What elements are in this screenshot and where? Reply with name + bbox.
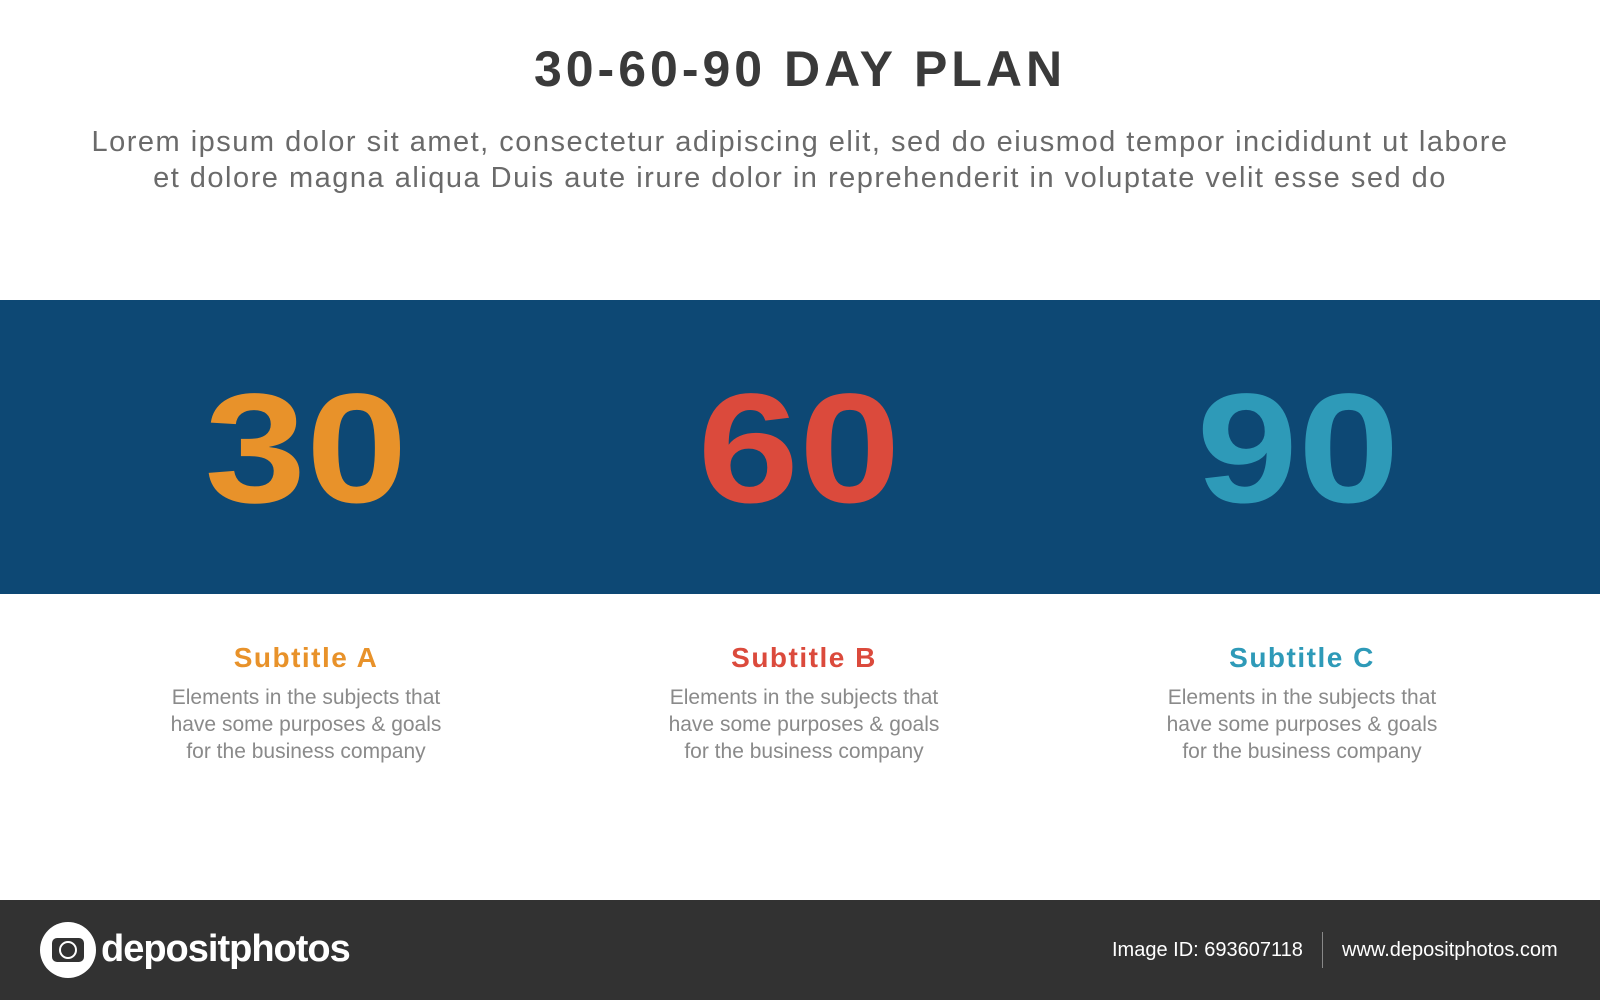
text C: Elements in the subjects that	[1168, 686, 1436, 709]
footer bar	[0, 900, 1600, 1000]
text C: for the business company	[1182, 740, 1422, 763]
text B	[669, 686, 939, 763]
text B: have some purposes & goals	[669, 713, 939, 736]
subtitle C: Subtitle C	[1229, 642, 1375, 673]
intro text: Lorem ipsum dolor sit amet, consectetur adipiscing elit, sed do eiusmod tempor incididunt ut labore	[91, 126, 1509, 158]
subtitle A: Subtitle A	[234, 642, 378, 673]
blue band	[0, 300, 1600, 594]
logo icon	[40, 922, 96, 978]
text C: have some purposes & goals	[1167, 713, 1437, 736]
text B: for the business company	[684, 740, 924, 763]
column B	[669, 642, 939, 763]
text A: Elements in the subjects that	[172, 686, 440, 709]
number 90: 90	[1196, 362, 1400, 536]
column C	[1167, 642, 1437, 763]
subtitle B: Subtitle B	[731, 642, 877, 673]
text A: have some purposes & goals	[171, 713, 441, 736]
website: www.depositphotos.com	[1342, 939, 1558, 961]
intro text	[91, 126, 1509, 194]
text C	[1167, 686, 1437, 763]
image id: Image ID: 693607118	[1112, 939, 1303, 961]
logo text: depositphotos	[101, 928, 350, 970]
title: 30-60-90 DAY PLAN	[534, 41, 1066, 97]
intro text: et dolore magna aliqua Duis aute irure dolor in reprehenderit in voluptate velit esse sed do	[153, 162, 1447, 194]
column A	[171, 642, 441, 763]
number 30: 30	[204, 362, 408, 536]
number 60: 60	[697, 362, 901, 536]
text A	[171, 686, 441, 763]
text A: for the business company	[186, 740, 426, 763]
text B: Elements in the subjects that	[670, 686, 938, 709]
